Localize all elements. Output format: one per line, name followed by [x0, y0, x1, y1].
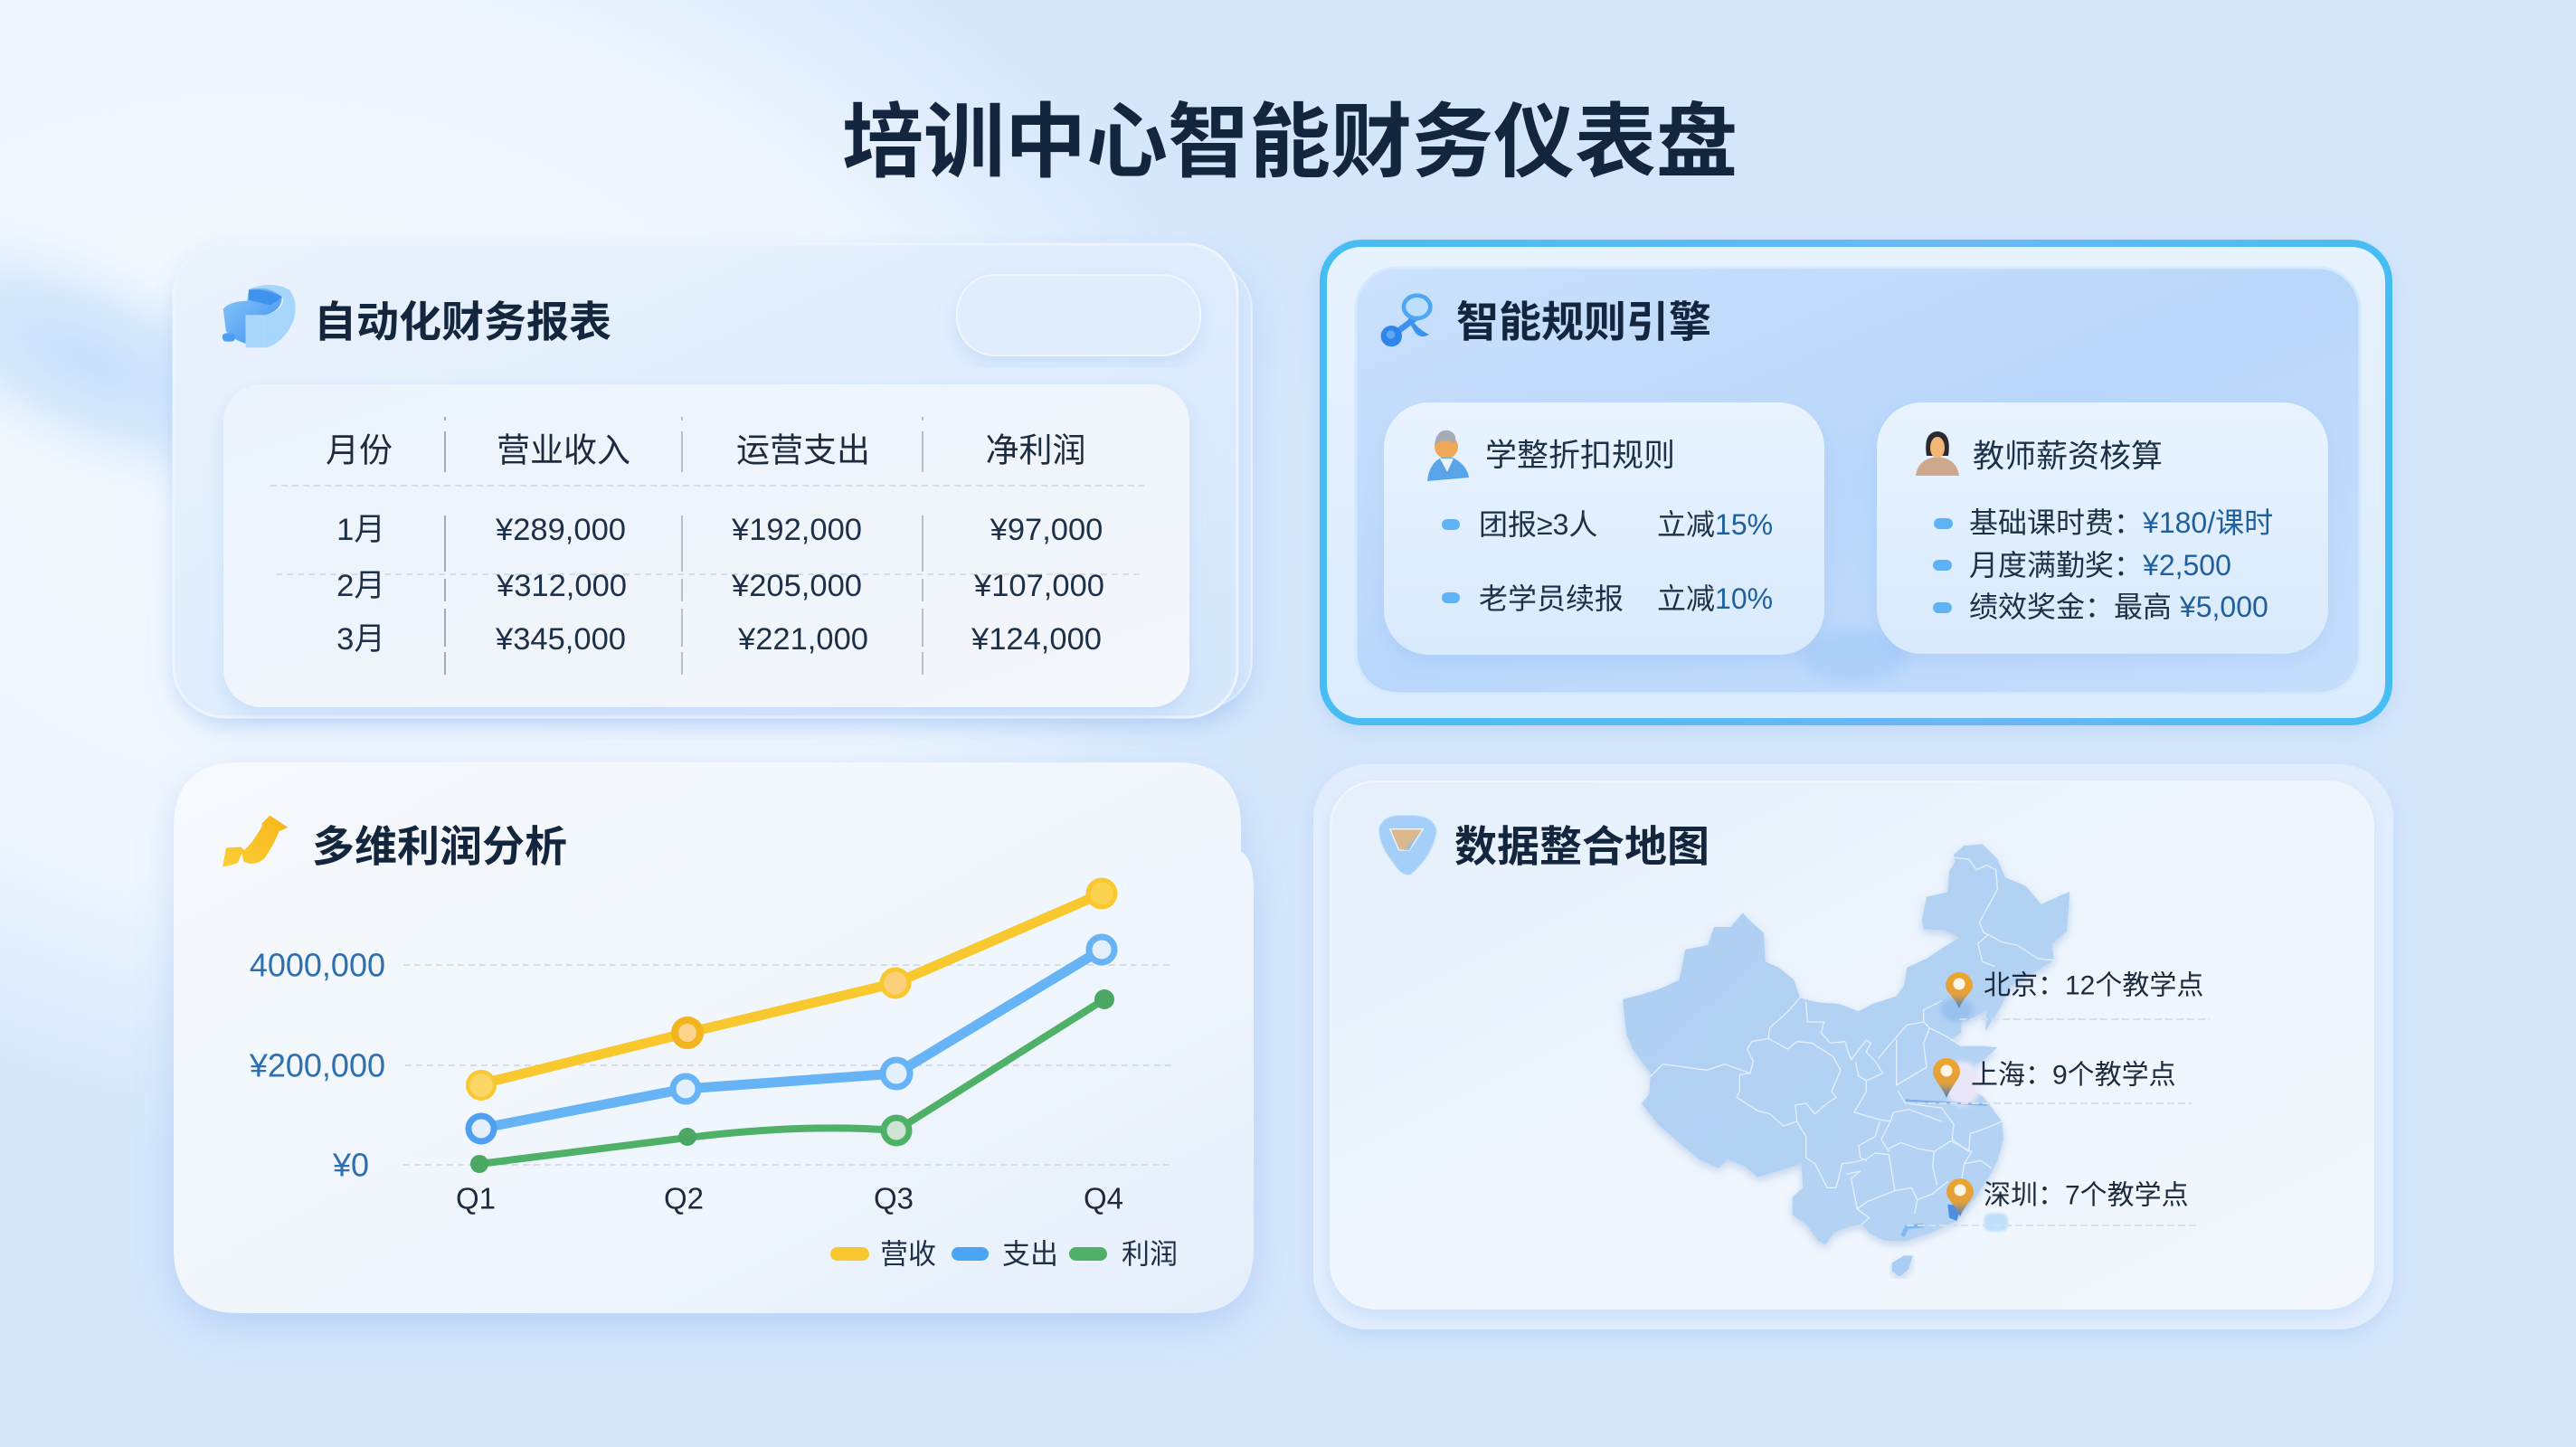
table header: 运营支出 — [736, 432, 870, 468]
legend — [830, 1239, 1178, 1270]
rule: renewal: 老学员续报 — [1479, 582, 1624, 615]
item: 基础课时费: 基础课时费：¥180/课时 — [1969, 506, 2273, 539]
table header: 营业收入 — [497, 432, 630, 468]
row: 1月: ¥289,000 — [495, 513, 626, 547]
row: 3月: 3月 — [336, 622, 385, 657]
panel: 自动化财务报表 — [174, 244, 1252, 717]
row: 1月: ¥192,000 — [731, 513, 862, 547]
icon: network — [1381, 296, 1430, 346]
row: 3月 — [336, 622, 1102, 657]
table card — [223, 384, 1189, 707]
rule: group: 立减15% — [1657, 508, 1773, 541]
row: 3月: ¥221,000 — [737, 622, 868, 657]
heading: 智能规则引擎 — [1456, 298, 1711, 345]
panel: 数据整合地图 — [1313, 764, 2393, 1329]
marker: 深圳 — [1907, 1178, 2196, 1225]
table header: 净利润 — [986, 432, 1085, 468]
line: expense — [469, 937, 1114, 1141]
y axis labels — [249, 946, 385, 1183]
panel: 多维利润分析 — [174, 762, 1254, 1313]
icon: report — [223, 285, 296, 348]
marker: 北京: 北京：12个教学点 — [1984, 971, 2203, 1000]
y axis labels: ¥0 — [332, 1147, 369, 1183]
line chart — [249, 880, 1174, 1215]
legend: 支出 — [1002, 1239, 1058, 1270]
table header: 月份 — [326, 432, 393, 468]
line: profit — [470, 989, 1114, 1173]
map highlights — [1902, 998, 2008, 1236]
x axis labels: Q1 — [456, 1181, 496, 1215]
rule: group — [1442, 508, 1773, 541]
icon: trend arrow — [223, 816, 288, 866]
row: 2月: ¥107,000 — [973, 569, 1104, 603]
icon: male avatar — [1427, 430, 1469, 481]
rule: renewal: 立减10% — [1657, 582, 1773, 615]
title: 培训中心智能财务仪表盘 — [842, 98, 1738, 188]
row: 3月: ¥124,000 — [971, 622, 1102, 657]
heading: 自动化财务报表 — [314, 298, 611, 345]
icon: female avatar — [1916, 431, 1959, 476]
table header — [326, 432, 1085, 468]
row: 2月: ¥312,000 — [496, 569, 627, 603]
china map — [1623, 844, 2069, 1277]
icon: shield — [1379, 815, 1436, 875]
marker: 上海: 上海：9个教学点 — [1971, 1060, 2176, 1091]
y axis labels: ¥200,000 — [249, 1047, 385, 1083]
subheading: 教师薪资核算 — [1973, 440, 2163, 474]
item: 绩效奖金: 绩效奖金：最高 ¥5,000 — [1969, 591, 2268, 623]
row: 1月: ¥97,000 — [990, 513, 1103, 547]
marker: 北京 — [1946, 971, 2210, 1019]
y axis labels: 4000,000 — [250, 946, 385, 984]
marker: 上海 — [1907, 1058, 2192, 1103]
item: 月度满勤奖: 月度满勤奖：¥2,500 — [1969, 549, 2231, 582]
x axis labels: Q2 — [664, 1181, 704, 1215]
legend: 利润 — [1122, 1239, 1178, 1270]
x axis labels: Q4 — [1084, 1181, 1123, 1215]
row: 3月: ¥345,000 — [495, 622, 626, 657]
rule: renewal — [1442, 582, 1773, 615]
card: 学整折扣规则 — [1384, 402, 1824, 655]
heading: 数据整合地图 — [1454, 823, 1709, 870]
line: revenue — [468, 880, 1115, 1099]
heading: 多维利润分析 — [312, 823, 567, 870]
marker: 深圳: 深圳：7个教学点 — [1984, 1181, 2189, 1210]
row: 2月 — [336, 569, 1104, 603]
empty pill — [957, 275, 1200, 355]
row: 2月: 2月 — [336, 569, 385, 603]
subheading: 学整折扣规则 — [1485, 438, 1675, 474]
x axis labels: Q3 — [874, 1181, 914, 1215]
rule: group: 团报≥3人 — [1479, 508, 1597, 541]
row: 1月: 1月 — [336, 513, 385, 547]
panel: 智能规则引擎 — [1323, 243, 2389, 722]
legend: 营收 — [880, 1239, 936, 1270]
row: 2月: ¥205,000 — [731, 569, 862, 603]
row: 1月 — [336, 513, 1103, 547]
x axis labels — [456, 1181, 1123, 1215]
island: Hainan — [1892, 1255, 1913, 1277]
card: 教师薪资核算 — [1877, 402, 2328, 654]
